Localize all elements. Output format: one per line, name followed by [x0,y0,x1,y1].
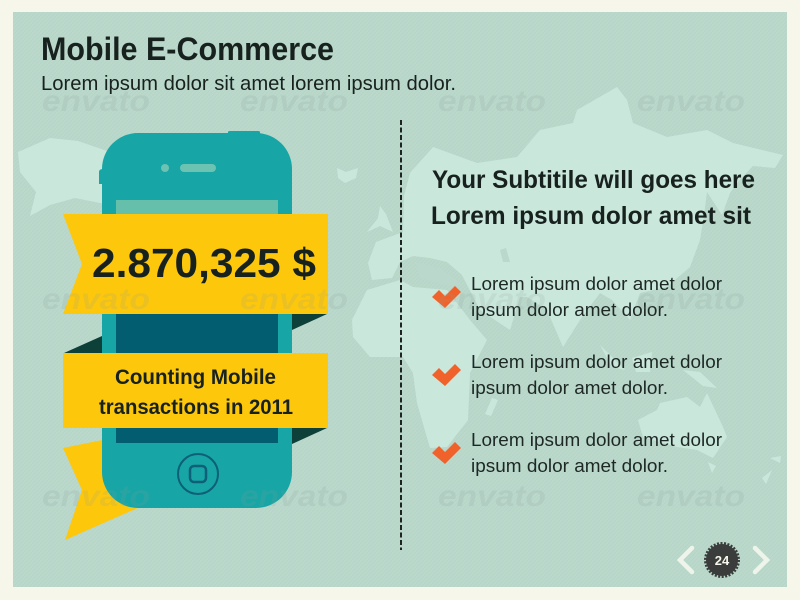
list item 1: Lorem ipsum dolor amet dolor [471,274,722,294]
phone speaker [161,164,216,172]
page badge [706,544,738,576]
map: british isles [367,206,393,232]
subtitle block: Lorem ipsum dolor amet sit [431,202,752,230]
title: Mobile E-Commerce [41,31,334,67]
world map [18,87,783,484]
phone screen [116,200,278,443]
watermarks: envato [240,85,348,118]
list item 3: ipsum dolor amet dolor. [471,456,668,476]
subtitle block [431,166,755,230]
map: inland seas [415,248,510,285]
phone body [102,133,292,508]
value text: 2.870,325 $ [92,240,316,286]
subtitle block: Your Subtitile will goes here [432,166,755,194]
subtitle: Lorem ipsum dolor sit amet lorem ipsum dolor. [41,73,456,95]
list item 2 [432,352,722,398]
ribbon: caption [63,353,328,428]
watermarks: envato [42,283,150,316]
icon: previous arrow [680,548,692,572]
icon: check [432,364,461,386]
caption text: Counting Mobile [115,366,276,389]
map: greenland [337,168,358,183]
phone buttons [99,131,260,184]
watermarks: envato [240,480,348,513]
ribbon: caption: transactions in 2011 [99,396,293,419]
watermarks: envato [42,480,150,513]
watermarks: envato [438,283,546,316]
map: australia [638,393,727,458]
phone [99,131,292,508]
icon: check [432,286,461,308]
map: eurasia [368,87,783,347]
watermarks [42,85,745,513]
watermarks: envato [438,85,546,118]
watermarks: envato [637,480,745,513]
divider [400,120,402,550]
watermarks: envato [637,283,745,316]
list item 2: Lorem ipsum dolor amet dolor [471,352,722,372]
ribbon tail [63,438,140,540]
watermarks: envato [42,85,150,118]
phone home button [178,454,218,494]
list item 3: Lorem ipsum dolor amet dolor [471,430,722,450]
map: islands [600,345,781,484]
list item 2: ipsum dolor amet dolor. [471,378,668,398]
list item 1 [432,274,722,320]
icon: next arrow [755,548,767,572]
map: madagascar [485,398,498,416]
icon: check [432,442,461,464]
page badge: 24 [715,553,730,568]
watermarks: envato [438,480,546,513]
ribbon: value [63,214,328,314]
list item 3 [432,430,722,476]
list item 1: ipsum dolor amet dolor. [471,300,668,320]
ribbon folds [64,314,327,444]
map: north america [18,138,110,216]
map: africa [352,280,487,448]
watermarks: envato [637,85,745,118]
watermarks: envato [240,283,348,316]
